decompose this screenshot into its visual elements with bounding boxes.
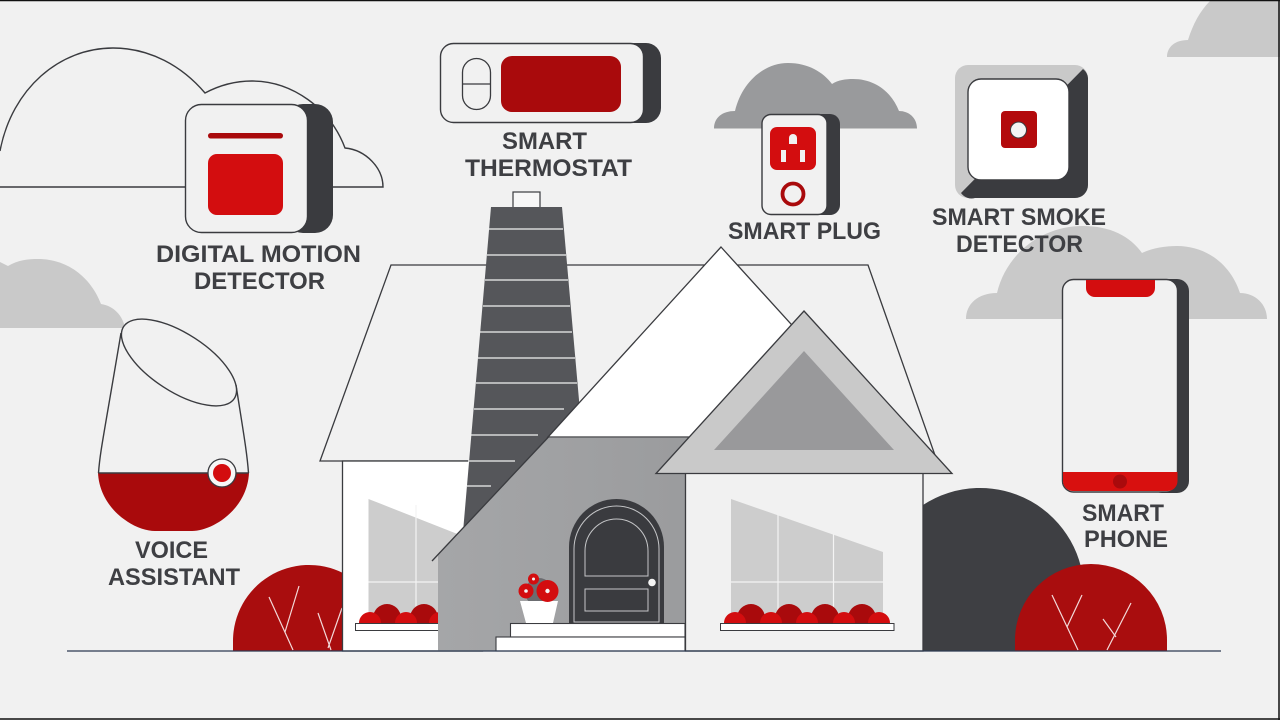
cloud: dark grey behind plug (714, 63, 917, 128)
main roof (320, 265, 937, 461)
device: digital motion detector (186, 104, 333, 233)
label: digital motion detector: DETECTOR (194, 268, 325, 295)
white upper gable (548, 247, 810, 437)
flower pot (518, 574, 558, 623)
label: smart thermostat: SMART (502, 128, 587, 155)
house (320, 192, 952, 651)
gable roof (656, 311, 952, 474)
label: smart phone: PHONE (1084, 526, 1168, 553)
chimney (463, 192, 579, 532)
device: smart smoke detector (955, 65, 1088, 198)
ground line (67, 650, 1221, 652)
label: smart smoke detector: SMART SMOKE (932, 204, 1106, 231)
device: voice assistant (98, 302, 250, 531)
cloud: light grey top right (1167, 1, 1280, 57)
cloud: outline top left (0, 48, 383, 187)
label: digital motion detector: DIGITAL MOTION (156, 241, 361, 268)
device: smart plug (762, 114, 840, 215)
right window (720, 499, 894, 634)
label: smart phone (1082, 500, 1168, 553)
label: smart smoke detector: DETECTOR (956, 231, 1083, 258)
label: smart plug: SMART PLUG (728, 218, 881, 245)
steps (496, 624, 685, 651)
label: smart thermostat: THERMOSTAT (465, 155, 632, 182)
left wall (342, 461, 482, 651)
grey front wall (438, 437, 700, 651)
front door (569, 499, 664, 623)
cloud: light grey behind phone (966, 226, 1267, 319)
label: voice assistant: VOICE (135, 537, 208, 564)
bush: red right (1015, 564, 1167, 651)
bush: dark round tree (923, 488, 1084, 651)
left window (356, 499, 460, 634)
label: voice assistant (108, 537, 240, 591)
label: digital motion detector (156, 241, 361, 295)
label: voice assistant: ASSISTANT (108, 564, 240, 591)
cloud: grey left (0, 259, 125, 328)
bush: red left (233, 565, 343, 651)
label: smart thermostat (465, 128, 632, 182)
right wall (686, 473, 923, 651)
device: smart thermostat (440, 43, 661, 123)
label: smart smoke detector (932, 204, 1106, 258)
label: smart phone: SMART (1082, 500, 1164, 527)
device: smart phone (1062, 279, 1189, 493)
